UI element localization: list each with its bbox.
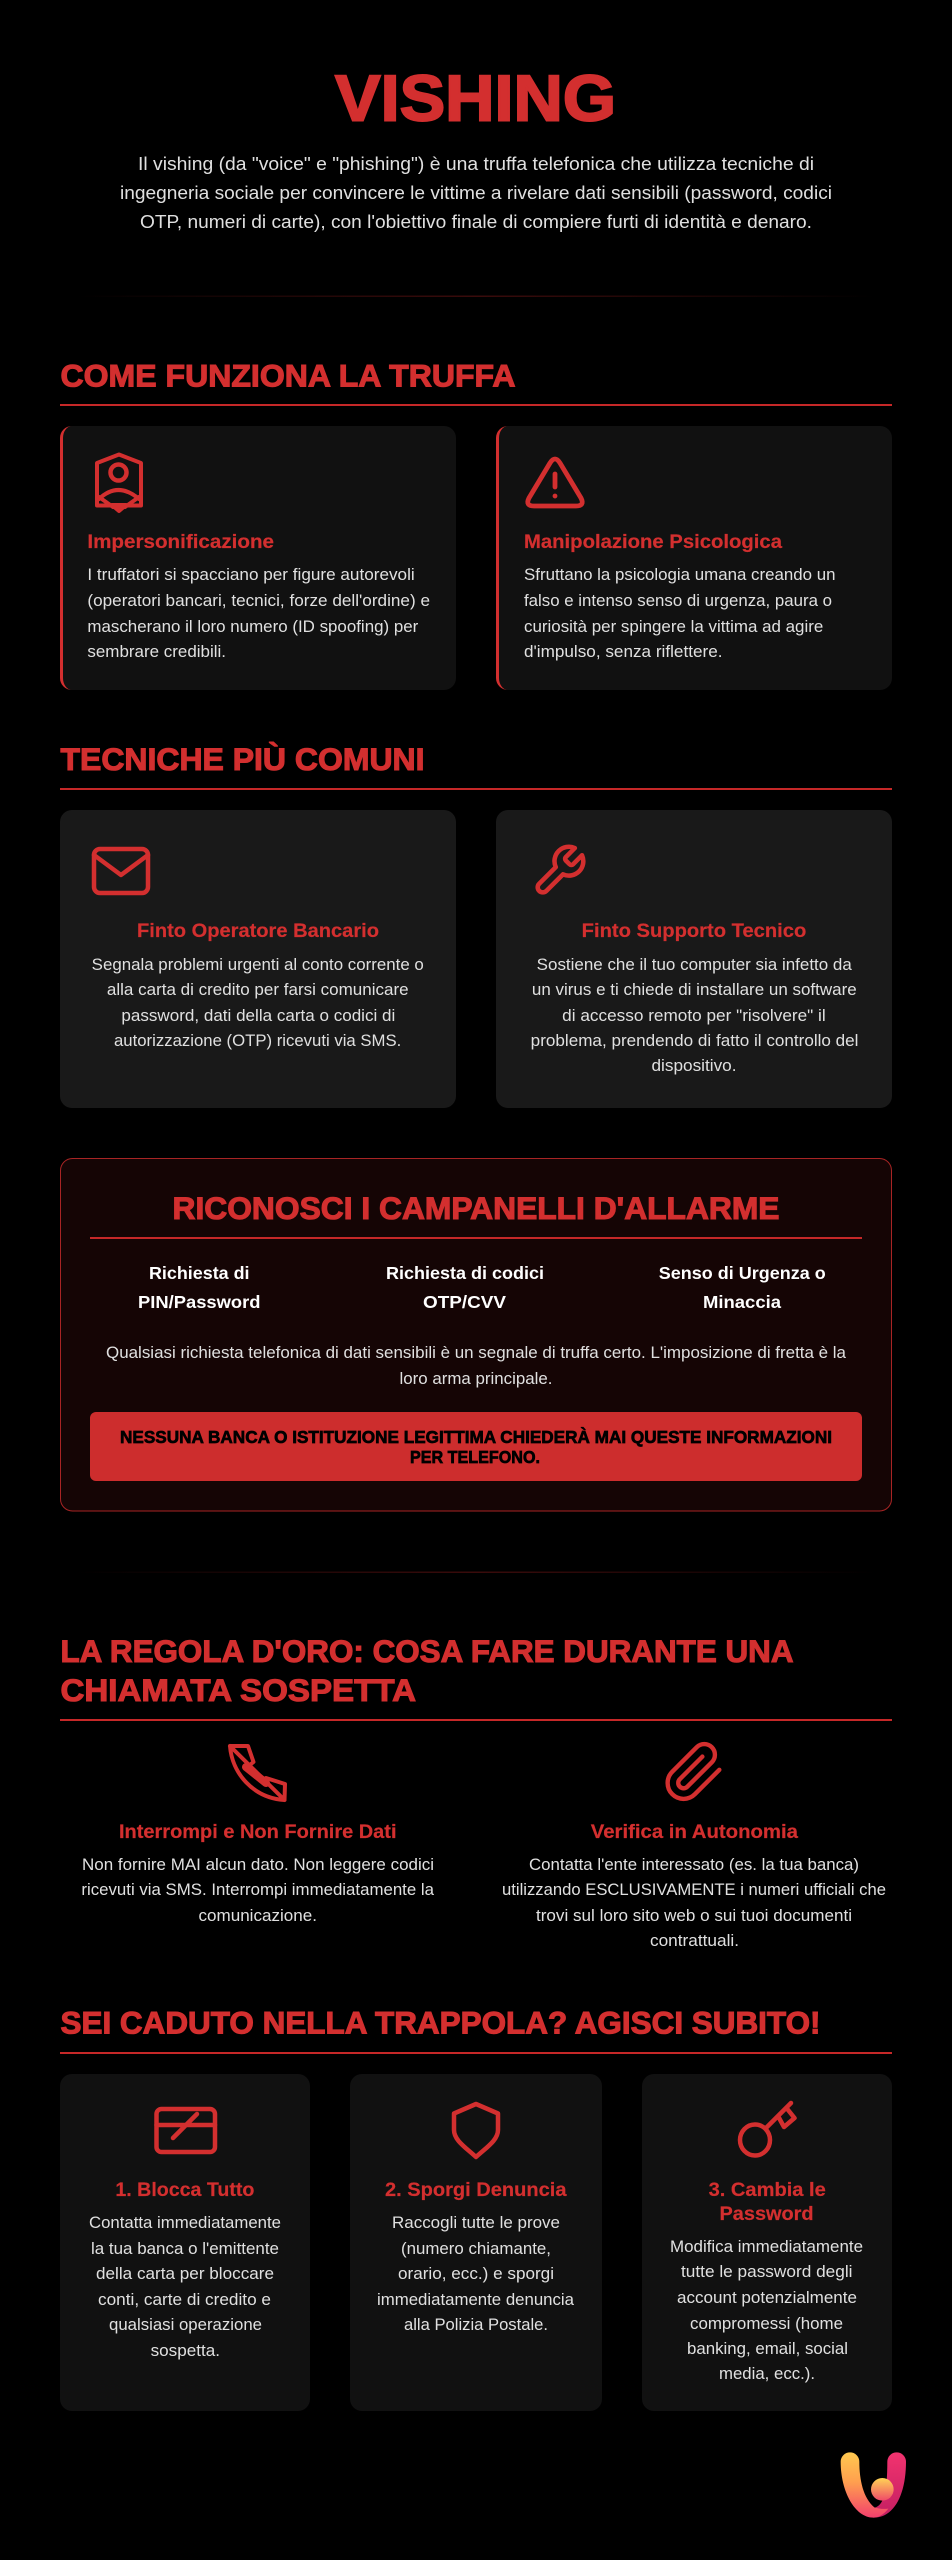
panel: sporgi denuncia xyxy=(350,2074,602,2411)
card text: d'impulso, senza riflettere. xyxy=(524,642,722,661)
card text: compromessi (home xyxy=(690,2314,843,2333)
alert explanation: Qualsiasi richiesta telefonica di dati sensibili è un segnale di truffa certo. L'imposizione di fretta è la xyxy=(106,1343,847,1362)
card text: orario, ecc.) e sporgi xyxy=(398,2264,554,2283)
heading xyxy=(60,1633,892,1721)
card text: Segnala problemi urgenti al conto corrente o xyxy=(92,955,424,974)
icon: wrench xyxy=(538,847,583,892)
panel: blocca tutto xyxy=(60,2074,310,2411)
card text: di accesso remoto per "risolvere" il xyxy=(562,1006,826,1025)
card text xyxy=(92,955,424,1050)
warning sign: pin/password xyxy=(138,1263,260,1312)
card title: Impersonificazione xyxy=(87,531,274,553)
warning sign: otp/cvv xyxy=(386,1263,544,1312)
section: tecniche più comuni xyxy=(60,741,892,1108)
logo xyxy=(841,2452,906,2518)
icon: user shield xyxy=(97,454,141,511)
card text: Sfruttano la psicologia umana creando un xyxy=(524,565,836,584)
card text xyxy=(524,565,836,661)
column text: Non fornire MAI alcun dato. Non leggere codici xyxy=(82,1855,434,1874)
card title: 1. Blocca Tutto xyxy=(115,2179,255,2201)
icon: blocked card xyxy=(156,2109,215,2152)
heading: CHIAMATA SOSPETTA xyxy=(60,1672,416,1708)
icon: shield xyxy=(454,2104,498,2157)
heading: RICONOSCI I CAMPANELLI D'ALLARME xyxy=(172,1190,780,1226)
card text: media, ecc.). xyxy=(719,2364,815,2383)
card text xyxy=(87,565,430,661)
card text: problema, prendendo di fatto il controllo del xyxy=(531,1031,858,1050)
card text: sospetta. xyxy=(151,2341,220,2360)
red banner: PER TELEFONO. xyxy=(410,1447,540,1467)
section: sei caduto nella trappola xyxy=(60,2004,892,2411)
card title: 2. Sporgi Denuncia xyxy=(385,2179,567,2201)
panel: finto operatore bancario xyxy=(60,810,456,1108)
column text: trovi sul loro sito web o sui tuoi documenti xyxy=(536,1906,852,1925)
icon: key xyxy=(740,2103,794,2156)
card text: (numero chiamante, xyxy=(401,2239,551,2258)
card text xyxy=(531,955,858,1075)
warning sign: otp/cvv: OTP/CVV xyxy=(423,1292,506,1312)
red banner xyxy=(90,1412,862,1481)
heading: SEI CADUTO NELLA TRAPPOLA? AGISCI SUBITO! xyxy=(60,2004,820,2040)
heading: TECNICHE PIÙ COMUNI xyxy=(60,741,424,777)
card text: mascherano il loro numero (ID spoofing) per xyxy=(87,617,419,636)
section: la regola d'oro xyxy=(60,1633,892,1950)
warning sign: pin/password: Richiesta di xyxy=(149,1263,250,1283)
card text: conti, carte di credito e xyxy=(98,2290,271,2309)
card title: Password xyxy=(720,2203,814,2225)
alert explanation: loro arma principale. xyxy=(400,1369,552,1388)
intro paragraph: Il vishing (da "voice" e "phishing") è una truffa telefonica che utilizza tecniche di xyxy=(138,153,814,174)
icon: warning triangle xyxy=(528,459,582,506)
column text: contrattuali. xyxy=(650,1931,739,1950)
card text xyxy=(89,2213,281,2360)
card text: sembrare credibili. xyxy=(87,642,226,661)
column title: Verifica in Autonomia xyxy=(591,1821,798,1843)
column text xyxy=(81,1855,435,1925)
section: come funziona la truffa xyxy=(60,358,892,690)
card text: alla carta di credito per farsi comunicare xyxy=(107,980,409,999)
warning sign: urgenza: Senso di Urgenza o xyxy=(659,1263,826,1283)
card text: falso e intenso senso di urgenza, paura o xyxy=(524,591,832,610)
warning sign: urgenza xyxy=(659,1263,826,1312)
card text: alla Polizia Postale. xyxy=(404,2315,548,2334)
card text: qualsiasi operazione xyxy=(109,2315,262,2334)
column: verifica xyxy=(502,1744,886,1950)
card text xyxy=(670,2237,863,2383)
icon: envelope xyxy=(94,849,148,893)
card text: della carta per bloccare xyxy=(96,2264,274,2283)
card text: account potenzialmente xyxy=(677,2288,857,2307)
icon: phone xyxy=(230,1746,285,1800)
warning sign: pin/password: PIN/Password xyxy=(138,1292,260,1312)
column title: Interrompi e Non Fornire Dati xyxy=(119,1821,396,1843)
header xyxy=(120,62,832,232)
card text: un virus e ti chiede di installare un software xyxy=(532,980,857,999)
panel: impersonificazione xyxy=(60,426,456,690)
intro paragraph: OTP, numeri di carte), con l'obiettivo finale di compiere furti di identità e denaro. xyxy=(140,211,812,232)
panel: campanelli d'allarme xyxy=(60,1158,892,1511)
card text: (operatori bancari, tecnici, forze dell'ordine) e xyxy=(87,591,430,610)
alert explanation xyxy=(106,1343,847,1388)
card text: tutte le password degli xyxy=(681,2262,852,2281)
column text: utilizzando ESCLUSIVAMENTE i numeri ufficiali che xyxy=(502,1880,886,1899)
card text: Modifica immediatamente xyxy=(670,2237,863,2256)
card text: curiosità per spingere la vittima ad agire xyxy=(524,617,823,636)
column text: ricevuti via SMS. Interrompi immediatamente la xyxy=(81,1880,435,1899)
card text: banking, email, social xyxy=(687,2339,848,2358)
intro paragraph: ingegneria sociale per convincere le vittime a rivelare dati sensibili (password, codici xyxy=(120,182,832,203)
column text xyxy=(502,1855,886,1950)
red banner: NESSUNA BANCA O ISTITUZIONE LEGITTIMA CHIEDERÀ MAI QUESTE INFORMAZIONI xyxy=(120,1426,832,1447)
card text: la tua banca o l'emittente xyxy=(91,2239,279,2258)
card text: password, dati della carta o codici di xyxy=(121,1006,395,1025)
card text: Raccogli tutte le prove xyxy=(392,2213,560,2232)
card title xyxy=(709,2179,826,2225)
card text: Contatta immediatamente xyxy=(89,2213,281,2232)
card text: Sostiene che il tuo computer sia infetto da xyxy=(537,955,853,974)
panel: finto supporto tecnico xyxy=(496,810,892,1108)
card text xyxy=(377,2213,575,2334)
panel: cambia le password xyxy=(642,2074,892,2411)
card text: I truffatori si spacciano per figure autorevoli xyxy=(87,565,415,584)
card title: Manipolazione Psicologica xyxy=(524,531,782,553)
warning sign: urgenza: Minaccia xyxy=(703,1292,782,1312)
card title: 3. Cambia le xyxy=(709,2179,826,2201)
heading: LA REGOLA D'ORO: COSA FARE DURANTE UNA xyxy=(60,1633,794,1669)
title: VISHING xyxy=(335,62,616,134)
card text: immediatamente denuncia xyxy=(377,2290,575,2309)
intro paragraph xyxy=(120,153,832,232)
card title: Finto Operatore Bancario xyxy=(137,920,379,942)
column text: Contatta l'ente interessato (es. la tua banca) xyxy=(529,1855,859,1874)
column text: comunicazione. xyxy=(198,1906,317,1925)
panel: manipolazione psicologica xyxy=(496,426,892,690)
heading: COME FUNZIONA LA TRUFFA xyxy=(60,358,516,394)
card text: autorizzazione (OTP) ricevuti via SMS. xyxy=(114,1031,401,1050)
card title: Finto Supporto Tecnico xyxy=(582,920,806,942)
column: interrompi xyxy=(81,1746,435,1925)
card text: dispositivo. xyxy=(652,1056,736,1075)
icon: paperclip xyxy=(668,1744,719,1799)
warning sign: otp/cvv: Richiesta di codici xyxy=(386,1263,544,1283)
